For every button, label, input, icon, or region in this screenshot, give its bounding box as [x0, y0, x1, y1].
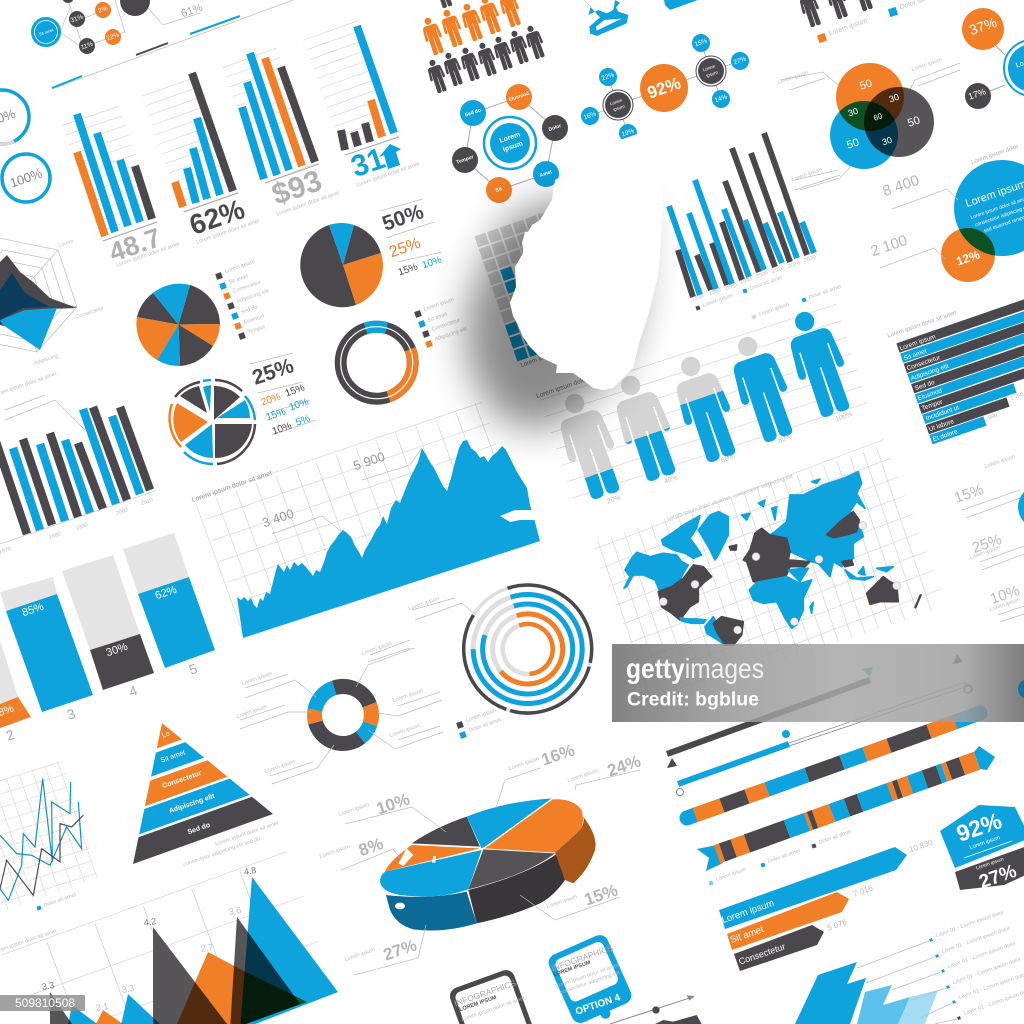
- bubble cluster 92%: 15%: [694, 38, 708, 48]
- 3D pie chart: [380, 798, 596, 930]
- venn diagram: 30: [881, 135, 893, 147]
- people percentage chart: Lorem ipsum: [758, 302, 790, 318]
- paired bar chart lower left: 2010: [140, 497, 154, 507]
- triangle area chart: 3.6: [228, 905, 242, 917]
- clustered bar chart: 2000: [755, 270, 769, 280]
- pyramid chart: Lorem ipsum dolor sit amet: [215, 820, 280, 848]
- triangle area chart: 3.3: [121, 983, 135, 995]
- venn diagram: 50: [845, 136, 861, 152]
- bubble cluster 92%: ipsum: [706, 70, 719, 78]
- percentage list right: Lorem ipsum: [984, 454, 1016, 470]
- stats: 50% 25% 15% 10%: 25%: [387, 235, 423, 261]
- stacked column 4: 4: [127, 682, 139, 700]
- watermark band: Credit: bgblue: [627, 690, 759, 710]
- stats: 50% 25% 15% 10%: 15%: [397, 262, 419, 278]
- badge 92% / 27%: Lorem ipsum: [969, 835, 1001, 851]
- pyramid chart: Sit amet: [160, 749, 186, 764]
- bubble cluster 92%: 27%: [733, 56, 747, 66]
- legend: pie chart seven slices: Sit amet: [228, 273, 249, 286]
- info card dark: Lorem ipsum dolor sit amet,: [461, 995, 528, 1023]
- horizontal bar list: Sit amet: [903, 348, 928, 362]
- people percentage chart: 60%: [720, 453, 736, 465]
- legend: pie chart seven slices: [215, 259, 270, 340]
- 3D pie labels: 15%: [582, 880, 620, 910]
- torn paper hole: [510, 132, 663, 390]
- triangle area chart: 3.3: [41, 980, 55, 992]
- horizontal bar list: Lorem ipsum dolor sit amet: [887, 310, 957, 340]
- 3D pie labels: 8%: [356, 834, 386, 860]
- info card blue option 4: Lorem ipsum dolor sit amet,: [555, 962, 622, 990]
- pyramid chart: [133, 723, 280, 868]
- 3D pie labels: Lorem ipsum: [319, 844, 351, 860]
- paired bar chart lower left: [0, 371, 155, 556]
- clustered bar chart: 1990: [739, 276, 753, 286]
- bubble cluster 92%: ipsum: [613, 104, 626, 112]
- info card blue option 4: [546, 932, 637, 1024]
- bubble cluster 92%: 14%: [714, 94, 728, 104]
- clustered bar chart: 2010: [771, 265, 785, 275]
- people percentage chart: 40%: [663, 474, 679, 486]
- clustered bar chart: 1960: [708, 287, 722, 297]
- horizontal bar list: Et dolore: [932, 428, 959, 443]
- arrow bars: [719, 838, 935, 971]
- pyramid chart: Adipiscing elit: [168, 793, 216, 815]
- network diagram: Sed do: [464, 107, 482, 119]
- people percentage chart: Dolor sit amet: [808, 284, 843, 301]
- legend: pie chart seven slices: Tempor: [247, 324, 266, 336]
- donut ring chart: [341, 327, 413, 399]
- paper tear shadow: [465, 200, 640, 430]
- bar chart 31: Lorem ipsum dolor sit amet: [356, 161, 421, 189]
- info card blue option 4: LOREM IPSUM: [553, 960, 592, 978]
- venn diagram: 50: [906, 114, 922, 130]
- stacked column 5: [123, 533, 215, 678]
- network diagram: Tempor: [456, 154, 475, 166]
- horizontal bar list: 990: [988, 413, 998, 421]
- info card blue option 4: INFOGRAPHICS: [550, 943, 615, 973]
- horizontal bar list: Incididunt ut: [925, 404, 960, 422]
- horizontal bar list: Tempor: [921, 398, 944, 412]
- line chart lower left: Dolor sit amet: [43, 892, 78, 909]
- clustered bar chart: 1950: [691, 293, 705, 303]
- big callout circles: 2 100: [868, 232, 910, 260]
- venn diagram: [777, 57, 960, 190]
- bar chart 48.7: [77, 108, 181, 269]
- big callout circles: 8 400: [880, 172, 922, 200]
- people pictogram: [419, 0, 548, 95]
- stacked column 2: [0, 640, 31, 744]
- badge 92% / 27%: 27%: [977, 861, 1019, 893]
- network diagram: ipsum: [502, 140, 524, 154]
- stats: 25% breakdown: [249, 353, 316, 437]
- percentage list right: 10%: [988, 582, 1022, 608]
- donut with callout labels: Lorem ipsum: [361, 641, 393, 657]
- pyramid chart: Consectetur: [162, 770, 203, 790]
- people percentage chart: 20%: [606, 494, 622, 506]
- people percentage chart: Lorem ipsum dolor: [535, 376, 589, 400]
- stacked column 2: 2: [4, 726, 16, 744]
- hierarchy bubbles top left: 31%: [70, 14, 84, 24]
- bubbles top right: 17%: [967, 86, 987, 102]
- pie chart 50%: [300, 223, 383, 307]
- 3D pie labels: Lorem ipsum: [567, 768, 599, 784]
- triangle area chart: 4.2: [143, 916, 157, 928]
- 3D pie labels: Lorem ipsum: [546, 894, 578, 910]
- bubbles top right: 37%: [967, 14, 999, 38]
- bar chart $93: $93: [268, 164, 326, 212]
- tile chart: [476, 216, 591, 356]
- info card dark: INFOGRAPHICS: [453, 978, 518, 1008]
- icon: blue tab: [664, 0, 698, 10]
- legend: donut ring chart: [414, 297, 468, 348]
- donut with callout labels: [236, 640, 443, 784]
- donut with callout labels: Lorem ipsum: [264, 759, 296, 775]
- stats: 50% 25% 15% 10%: 50%: [379, 200, 427, 236]
- bar chart $93: Lorem ipsum dolor sit amet: [276, 190, 341, 218]
- concentric ring chart: Lorem ipsum: [465, 708, 497, 724]
- stacked column 5: 5: [187, 660, 199, 678]
- radar chart: [0, 238, 105, 367]
- stats: 25% breakdown: 10%: [288, 397, 310, 413]
- bubble cluster 92%: 22%: [601, 72, 615, 82]
- arrow bars: 7 016: [852, 883, 874, 899]
- bubble cluster 92%: 16%: [583, 111, 597, 121]
- venn diagram: Lorem ipsum: [777, 70, 809, 86]
- 3D pie labels: 24%: [605, 751, 643, 781]
- horizontal bar list: Sed do: [914, 379, 936, 392]
- horizontal bar list: Eiusmod: [917, 387, 943, 402]
- pyramid chart: consectetur adipiscing elit sed do: [183, 836, 261, 868]
- people top right with legend: [796, 0, 942, 43]
- percentage list right: 25%: [970, 531, 1004, 557]
- info card blue option 4: consectetur adipiscing elit: [559, 970, 621, 996]
- people percentage chart: 80%: [777, 433, 793, 445]
- clustered bar chart: [669, 133, 840, 311]
- stock area chart: 5 900: [351, 449, 387, 473]
- percentage list right: Lorem ipsum: [989, 597, 1021, 613]
- horizontal bar list: Ut labore: [928, 418, 955, 433]
- donut with callout labels: Lorem ipsum: [392, 688, 424, 704]
- bar chart 62%: [168, 73, 261, 246]
- watermark band: [612, 644, 1024, 722]
- legend: pie chart seven slices: Lorem ipsum: [224, 259, 256, 275]
- layered blue arrows with layer labels: Layer 01 - Lorem ipsum dolor: [952, 957, 1022, 986]
- big callout circles: [868, 144, 1024, 282]
- world map: Lorem ipsum dolor sit amet, consectetur adipiscing elit: [666, 473, 794, 522]
- 3D pie labels: Lorem ipsum: [508, 756, 540, 772]
- legend: ribbon: [708, 829, 853, 886]
- timeline top left: [52, 0, 293, 89]
- bubble cluster 92%: 19%: [621, 128, 635, 138]
- venn diagram: 30: [888, 92, 900, 104]
- clustered bar chart: Dolor sit amet: [749, 275, 784, 292]
- clustered bar chart: Lorem ipsum: [702, 293, 734, 309]
- bubble cluster 92%: 92%: [645, 73, 683, 103]
- badge 92% / 27%: Lorem ipsum: [975, 856, 1005, 872]
- stock area chart: [191, 440, 540, 638]
- legend: pie chart seven slices: Adipiscing elit: [236, 288, 270, 305]
- 3D pie labels: 16%: [539, 740, 577, 770]
- bar chart 31: 31: [347, 142, 389, 184]
- people top right with legend: Lorem ipsum: [828, 17, 869, 37]
- legend: pie chart seven slices: Consectetur: [232, 279, 262, 295]
- big callout circles: Lorem ipsum dolor: [971, 144, 1019, 166]
- stats: 25% breakdown: 10%: [271, 421, 293, 437]
- bar chart $93: [242, 51, 341, 218]
- bar chart 62%: 62%: [185, 193, 249, 241]
- stacked column 3: 3: [65, 705, 77, 723]
- venn diagram: Lorem ipsum: [791, 167, 823, 183]
- bar chart 62%: Lorem ipsum dolor sit amet: [196, 218, 261, 246]
- stacked column 5: 62%: [154, 584, 179, 602]
- triangle area chart: [0, 865, 338, 1024]
- radar chart: Adipiscing: [33, 353, 59, 367]
- clustered bar chart: 2030: [803, 254, 817, 264]
- clustered bar chart: 1980: [724, 282, 738, 292]
- hierarchy bubbles top left: 61%: [180, 2, 205, 20]
- percentage list right: [952, 454, 1024, 622]
- hierarchy bubbles top left: [31, 0, 205, 54]
- legend: ribbon: Dolor sit amet: [818, 829, 853, 846]
- stock area chart: 3 400: [260, 506, 296, 530]
- legend: ribbon: Lorem ipsum: [715, 867, 747, 883]
- info card dark: [447, 968, 537, 1024]
- horizontal bar list: Consectetur: [906, 354, 942, 372]
- radar chart: Consectetur: [75, 305, 105, 321]
- network diagram: Dolor: [548, 123, 562, 133]
- stats: 25% breakdown: 15%: [284, 383, 306, 399]
- horizontal bar list: Lorem ipsum: [899, 333, 937, 352]
- triangle area chart: 2.7: [200, 942, 214, 954]
- info card blue option 4: OPTION 4: [574, 992, 622, 1018]
- progress ring 100%: [2, 154, 50, 202]
- layered blue arrows with layer labels: Layer 01 - Lorem ipsum dolor: [947, 941, 1017, 970]
- legend: donut ring chart: Consectetur: [431, 317, 461, 333]
- radar chart: Lorem: [58, 238, 75, 249]
- network diagram: [452, 84, 568, 203]
- stacked column 4: [62, 555, 154, 700]
- venn diagram: 30: [847, 106, 859, 118]
- pie chart seven slices: [136, 284, 220, 366]
- horizontal bar list: [887, 299, 1024, 443]
- exploded pie chart with outer ring: [170, 380, 255, 464]
- hierarchy bubbles top left: 22%: [106, 32, 120, 42]
- stats: 25% breakdown: 5%: [294, 413, 312, 429]
- arrow bars: 10 830: [908, 838, 935, 854]
- stats: 25% breakdown: 25%: [249, 354, 297, 390]
- triangle area chart: 2.1: [95, 1001, 109, 1013]
- layered blue arrows with layer labels: Layer 01 - Lorem ipsum dolor: [941, 926, 1011, 955]
- hierarchy bubbles top left: 2%: [97, 5, 109, 15]
- stats: 25% breakdown: 20%: [260, 392, 282, 408]
- network diagram: Lorem: [499, 131, 521, 145]
- bar chart 31: [328, 23, 421, 189]
- badge 92% / 27%: [940, 805, 1024, 893]
- image id label: 509810508: [15, 996, 75, 1010]
- big callout circles: 12%: [954, 247, 982, 269]
- donut with callout labels: Lorem ipsum: [241, 671, 273, 687]
- 3D pie labels: 27%: [381, 935, 419, 965]
- bubbles top right: [962, 8, 1024, 109]
- arrow line with dot: [610, 995, 702, 1024]
- stats: 50% 25% 15% 10%: 10%: [421, 255, 443, 271]
- concentric ring chart: Lorem ipsum: [408, 596, 440, 612]
- tile chart caption: Lorem ipsum: [520, 352, 555, 369]
- line chart lower left: [0, 777, 84, 911]
- progress ring partial: [0, 90, 29, 144]
- world map: [624, 472, 921, 655]
- donut with callout labels: Lorem ipsum: [389, 723, 421, 739]
- 3D pie labels: Lorem ipsum: [344, 947, 376, 963]
- venn diagram: Lorem ipsum: [911, 57, 943, 73]
- paired bar chart lower left: 1980: [48, 531, 62, 541]
- pyramid chart: Lo: [161, 730, 171, 740]
- people percentage chart: 100%: [834, 411, 854, 423]
- legend: pie chart seven slices: Sed do: [240, 304, 258, 316]
- bar chart 48.7: 48.7: [105, 222, 165, 268]
- network diagram: Eiusmod: [508, 91, 530, 103]
- network diagram: Sit: [495, 186, 503, 194]
- 3D pie labels: [319, 740, 643, 975]
- triangle area chart: 4.8: [243, 865, 257, 877]
- stacked column 4: 30%: [105, 641, 130, 659]
- venn diagram: 60: [872, 111, 884, 123]
- arrow bars: Sit amet: [729, 924, 766, 946]
- badge 92% / 27%: 92%: [953, 807, 1005, 847]
- bubble cluster 92%: Lorem: [609, 97, 623, 106]
- clustered bar chart: 2020: [787, 260, 801, 270]
- layered blue arrows with layer labels: [795, 910, 1024, 1024]
- stock area chart: Lorem ipsum dolor sit amet: [191, 470, 273, 504]
- bar chart 48.7: Lorem ipsum dolor sit amet: [116, 241, 181, 269]
- striped rounded bar: [687, 713, 980, 818]
- striped ribbon arrow: [697, 746, 995, 871]
- bubble cluster 92%: Lorem: [702, 63, 716, 72]
- percentage list right: 15%: [952, 481, 986, 507]
- 3D pie labels: Lorem ipsum: [338, 802, 370, 818]
- stacked column 3: 85%: [21, 601, 46, 619]
- stacked column 3: [0, 577, 93, 723]
- image id label: [0, 995, 85, 1011]
- concentric ring chart: [408, 568, 608, 739]
- paired bar chart lower left: 2000: [115, 507, 129, 517]
- progress sliders: [667, 654, 972, 796]
- stats: 50% 25% 15% 10%: [379, 199, 443, 278]
- legend: donut ring chart: Sit amet: [427, 311, 448, 324]
- people percentage chart: [535, 284, 859, 506]
- info card dark: LOREM IPSUM: [459, 995, 498, 1013]
- pyramid chart: Sed do: [187, 822, 211, 836]
- legend: donut ring chart: Adipiscing elit: [434, 326, 468, 343]
- stats: 25% breakdown: 15%: [265, 407, 287, 423]
- legend: pie chart seven slices: Eiusmod: [243, 313, 265, 326]
- legend: ribbon: Dolor sit amet: [767, 848, 802, 865]
- arrow bars: Consectetur: [737, 941, 787, 967]
- bubble cluster 92%: [581, 34, 749, 142]
- icon: blue tray: [584, 0, 628, 36]
- percentage list right: Lorem ipsum: [969, 545, 1001, 561]
- arrow bars: Lorem ipsum: [720, 898, 776, 926]
- donut with callout labels: Lorem ipsum: [236, 704, 268, 720]
- venn diagram: 50: [858, 77, 874, 93]
- legend: donut ring chart: Lorem ipsum: [423, 297, 455, 313]
- progress ring 100%: 100%: [8, 165, 45, 191]
- concentric ring chart: Dolor sit amet: [468, 717, 503, 734]
- paired bar chart lower left: 1990: [75, 522, 89, 532]
- horizontal bar list: Adipiscing elit: [910, 363, 950, 382]
- 3D pie labels: 10%: [374, 789, 412, 819]
- network diagram: Amet: [539, 169, 553, 179]
- layered blue arrows with layer labels: Layer 01 - Lorem ipsum dolor: [935, 910, 1005, 939]
- watermark band: gettyimages: [626, 652, 764, 684]
- hierarchy bubbles top left: 11%: [80, 41, 94, 51]
- arrow bars: 5 076: [826, 917, 848, 933]
- hierarchy bubbles top left: Sit amet: [38, 27, 55, 37]
